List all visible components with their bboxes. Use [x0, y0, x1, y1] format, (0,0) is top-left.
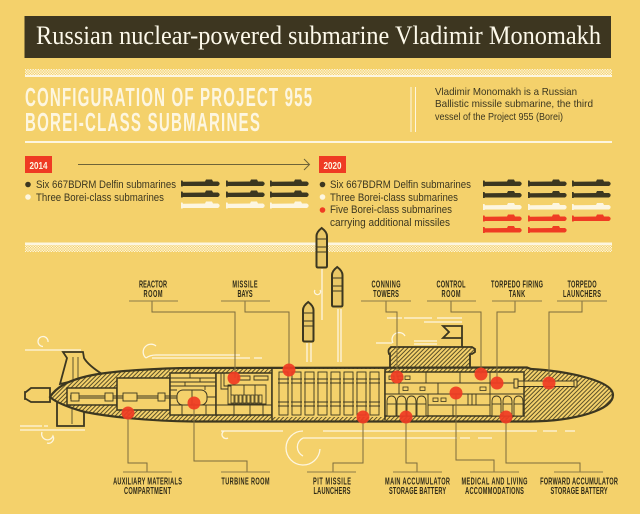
legend: 2020: Six 667BDRM Delfin submarines	[330, 179, 471, 191]
hull	[50, 368, 613, 422]
tail rudders	[25, 352, 102, 426]
arrow: 2014 to 2020	[78, 159, 310, 170]
badge: 2014: 2014	[30, 160, 48, 172]
label: medical and living accommodations: ACCOMMODATIONS	[465, 485, 524, 496]
label: main accumulator storage battery: STORAGE BATTERY	[389, 485, 446, 496]
badge: 2020	[319, 156, 346, 173]
badge: 2020: 2020	[324, 160, 342, 172]
label: control room: ROOM	[441, 288, 461, 299]
section heading: BOREI-CLASS SUBMARINES	[25, 108, 260, 137]
label: reactor room	[129, 279, 178, 301]
label: reactor room: REACTOR	[139, 279, 167, 290]
label: main accumulator storage battery	[385, 472, 450, 496]
label: forward accumulator storage battery: STORAGE BATTERY	[550, 485, 608, 496]
description block	[411, 86, 593, 132]
label: reactor room: ROOM	[143, 288, 163, 299]
label: missile bays	[221, 279, 270, 301]
label: forward accumulator storage battery: FORWARD ACCUMULATOR	[540, 476, 618, 487]
label: missile bays: BAYS	[237, 288, 253, 299]
label: torpedo firing tank	[491, 279, 543, 301]
label: pit missile launchers	[307, 472, 356, 496]
label: auxiliary materials compartment: COMPARTMENT	[124, 485, 171, 496]
label: pit missile launchers: PIT MISSILE	[313, 476, 351, 487]
label: medical and living accommodations: MEDICAL AND LIVING	[461, 476, 528, 487]
title banner: Russian nuclear-powered submarine Vladimir Monomakh	[36, 21, 601, 50]
description block: Vladimir Monomakh is a Russian	[435, 86, 577, 98]
panel: 2014 fleet	[25, 156, 309, 208]
conning tower and flag	[388, 326, 475, 368]
label: pit missile launchers: LAUNCHERS	[314, 485, 351, 496]
missile 3	[303, 302, 314, 342]
label: conning towers	[361, 279, 411, 301]
label: forward accumulator storage battery	[540, 472, 618, 496]
label: control room	[427, 279, 476, 301]
label: main accumulator storage battery: MAIN ACCUMULATOR	[385, 476, 450, 487]
label: control room: CONTROL	[436, 279, 466, 290]
legend: 2020: Five Borei-class submarines	[330, 204, 452, 216]
label: torpedo firing tank: TANK	[509, 288, 525, 299]
label: auxiliary materials compartment: AUXILIARY MATERIALS	[113, 476, 182, 487]
label: turbine room: TURBINE ROOM	[221, 476, 270, 487]
top checker band	[25, 69, 612, 77]
badge: 2014	[25, 156, 52, 173]
missile 1	[316, 228, 327, 268]
description block: vessel of the Project 955 (Borei)	[435, 111, 563, 123]
section heading: CONFIGURATION OF PROJECT 955	[25, 83, 312, 112]
missile 2	[332, 267, 342, 306]
legend: 2014	[25, 179, 176, 204]
legend: 2020	[320, 179, 471, 229]
torpedo tube	[514, 379, 577, 388]
label: missile bays: MISSILE	[232, 279, 258, 290]
label: torpedo firing tank: TORPEDO FIRING	[491, 279, 543, 290]
submarine cutaway	[25, 301, 613, 472]
description block: Ballistic missile submarine, the third	[435, 98, 593, 110]
lower checker band	[25, 242, 612, 252]
label: conning towers: CONNING	[371, 279, 401, 290]
red location markers	[122, 364, 556, 424]
label: torpedo launchers	[557, 279, 607, 301]
label: auxiliary materials compartment	[113, 472, 182, 496]
aft compartments	[67, 373, 272, 415]
legend: 2014: Three Borei-class submarines	[36, 192, 164, 204]
label: conning towers: TOWERS	[373, 288, 399, 299]
section heading	[25, 83, 312, 137]
swoosh lines	[20, 269, 575, 465]
label: medical and living accommodations	[461, 472, 528, 496]
leader lines	[128, 301, 582, 472]
missile tubes	[272, 368, 385, 420]
panel: 2020 fleet	[319, 156, 611, 233]
legend: 2020: Three Borei-class submarines	[330, 192, 458, 204]
submarine icons: 2014	[181, 180, 309, 208]
label: torpedo launchers: TORPEDO	[567, 279, 597, 290]
label: torpedo launchers: LAUNCHERS	[563, 288, 601, 299]
title banner	[24, 16, 611, 58]
submarine icons: 2020	[483, 180, 611, 233]
forward compartments	[385, 372, 524, 416]
legend: 2020: carrying additional missiles	[330, 217, 450, 229]
legend: 2014: Six 667BDRM Delfin submarines	[36, 179, 176, 191]
